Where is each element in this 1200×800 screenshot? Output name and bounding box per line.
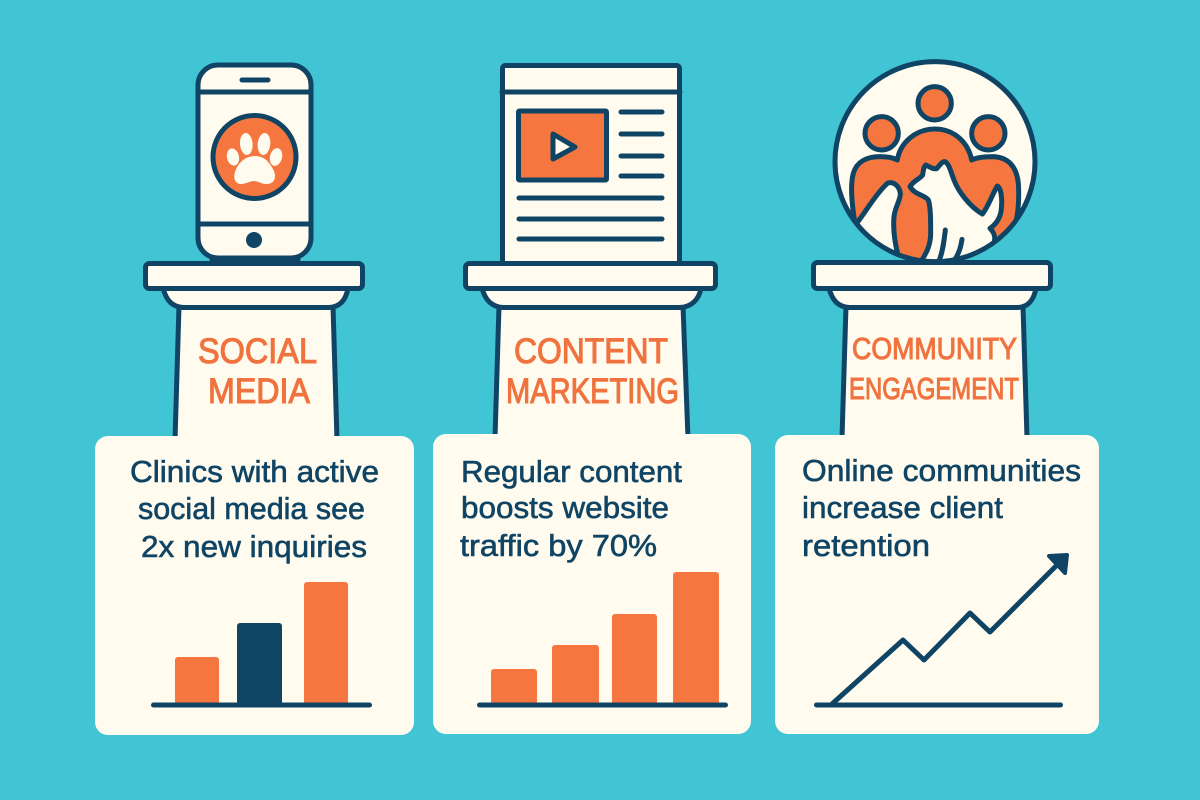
text: community statistic: retention xyxy=(802,528,930,563)
infographic: three marketing pillars xyxy=(95,59,1099,735)
text: content marketing statistic xyxy=(460,454,682,563)
label: community engagement xyxy=(849,331,1019,406)
bar chart: four rising bars xyxy=(480,572,726,705)
bar chart: three bars xyxy=(154,582,370,705)
text: content marketing statistic: boosts website xyxy=(461,490,669,525)
icon: smartphone with paw xyxy=(198,65,311,260)
pillar: social media xyxy=(146,65,362,440)
icon: cat silhouette xyxy=(856,180,903,253)
text: social media statistic: Clinics with active xyxy=(130,454,379,489)
text: community statistic: increase client xyxy=(802,490,1003,525)
panel: content marketing stat xyxy=(433,434,751,734)
text: community statistic xyxy=(802,453,1081,563)
pillar: community engagement xyxy=(814,62,1050,438)
label: social media: SOCIAL xyxy=(198,332,317,371)
line chart: rising arrow xyxy=(816,555,1067,705)
icon: people and pets in a circle xyxy=(835,62,1035,267)
label: content marketing: MARKETING xyxy=(506,372,679,411)
panel: social media stat xyxy=(95,436,414,735)
label: community engagement: COMMUNITY xyxy=(852,331,1017,366)
pillar column xyxy=(814,262,1050,438)
icon: web page with video xyxy=(502,66,680,266)
label: content marketing: CONTENT xyxy=(514,332,668,371)
icon: dog silhouette xyxy=(910,162,1002,263)
pillar column xyxy=(146,264,362,440)
label: social media: MEDIA xyxy=(208,372,311,411)
label: content marketing xyxy=(506,332,679,411)
label: community engagement: ENGAGEMENT xyxy=(849,371,1019,406)
text: content marketing statistic: Regular content xyxy=(461,454,682,489)
text: social media statistic: 2x new inquiries xyxy=(141,529,367,564)
pillar column xyxy=(466,264,716,438)
text: social media statistic: social media see xyxy=(138,491,365,526)
text: content marketing statistic: traffic by 70% xyxy=(460,528,657,563)
panel: community engagement stat xyxy=(775,435,1099,734)
text: social media statistic xyxy=(130,454,379,564)
pillar: content marketing xyxy=(466,66,716,438)
label: social media xyxy=(198,332,317,411)
text: community statistic: Online communities xyxy=(802,453,1081,488)
